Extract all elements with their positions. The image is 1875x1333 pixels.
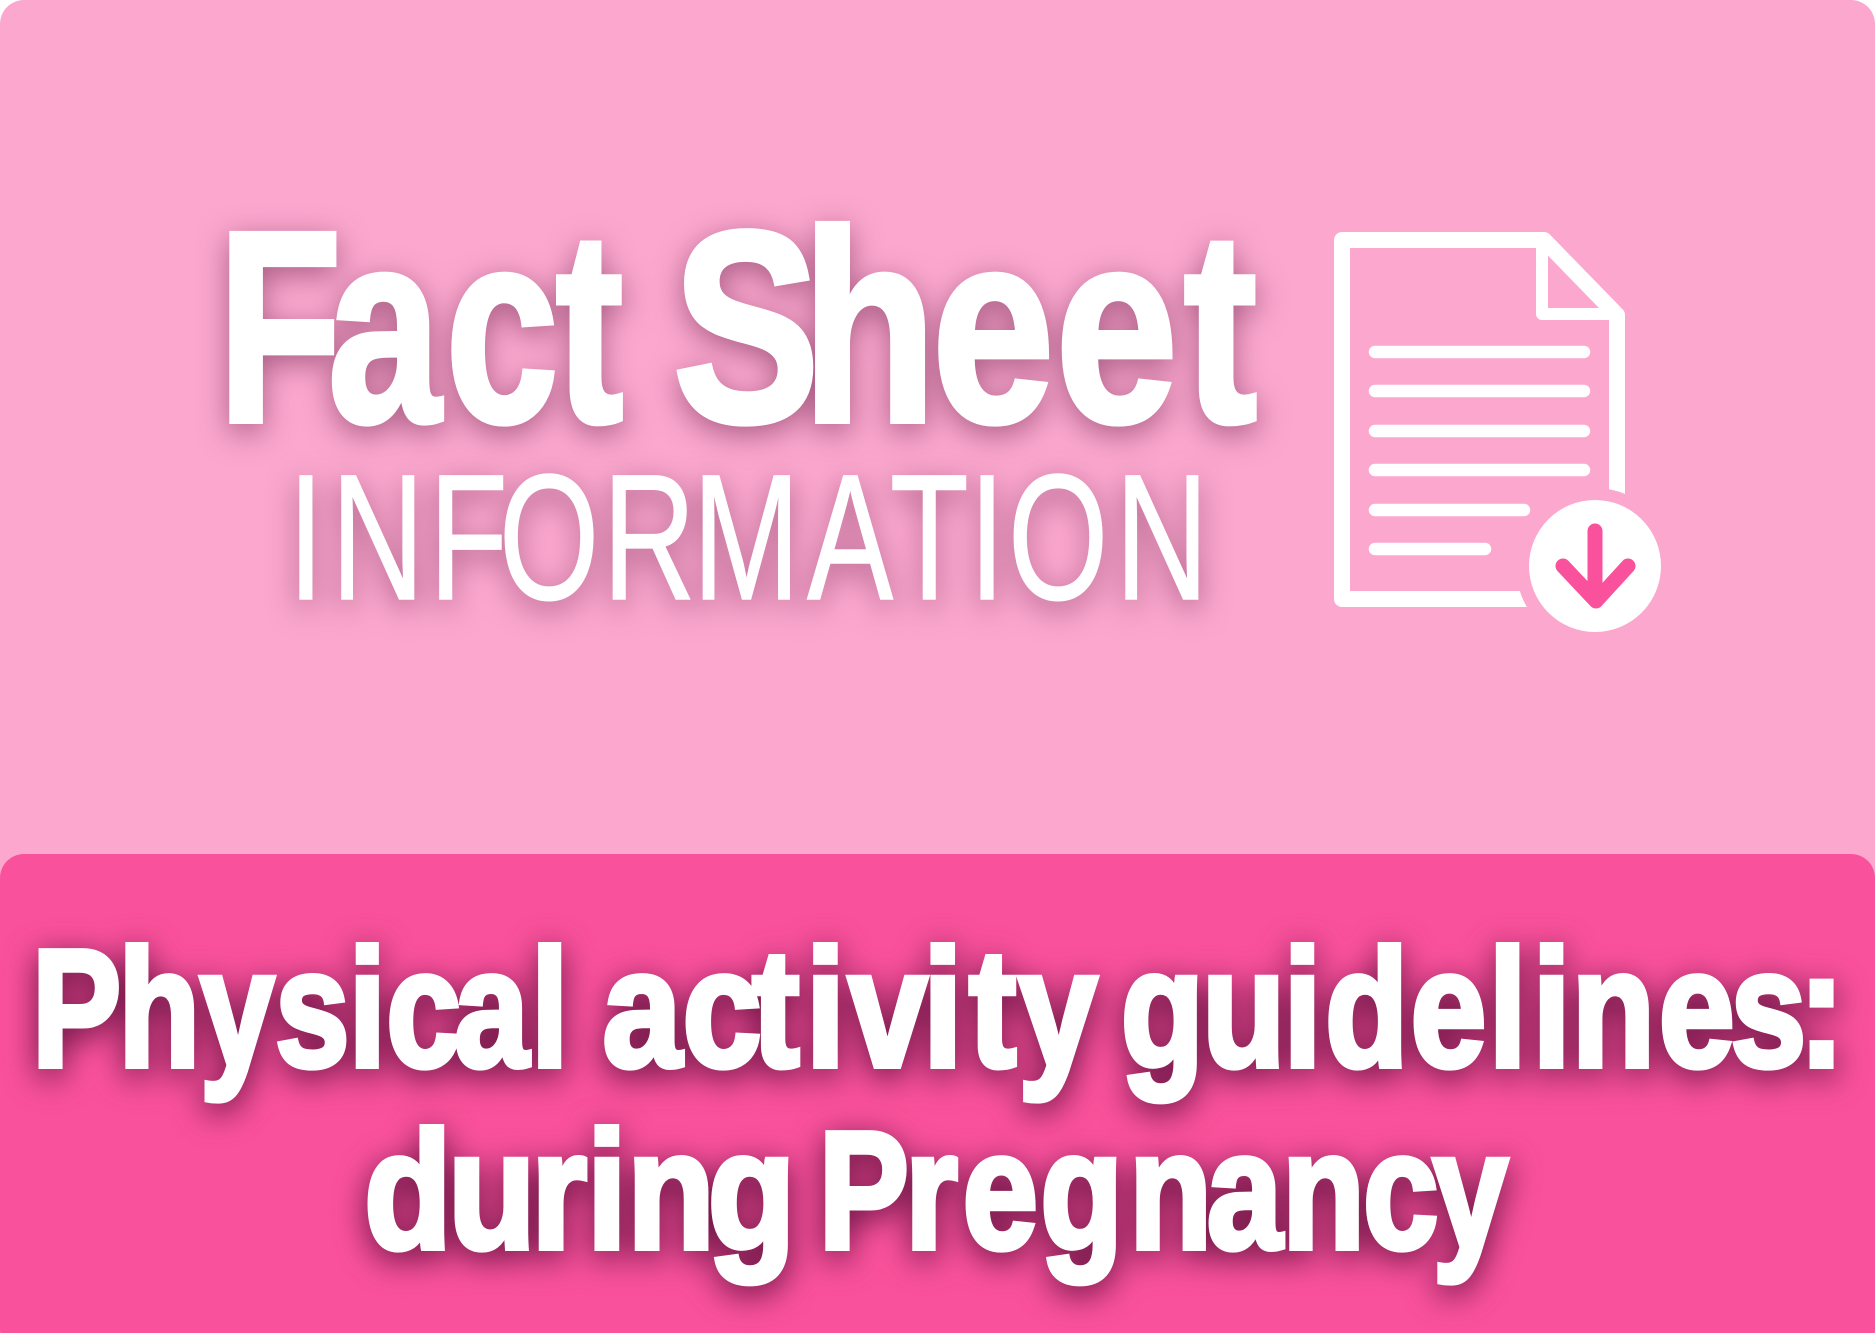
heading: Fact Sheet: Sheet	[673, 176, 1257, 479]
heading: Fact Sheet: Fact	[218, 175, 623, 479]
title line 2: Pregnancy	[819, 1097, 1508, 1284]
title line 2	[364, 1097, 1508, 1284]
title line 1: guidelines:	[1121, 916, 1844, 1102]
panel: bottom title band	[0, 854, 1875, 1333]
heading: Fact Sheet	[218, 175, 1257, 479]
subheading: INFORMATION: INFORMATION	[288, 438, 1208, 638]
title line 1: activity	[603, 915, 1097, 1102]
title line 2: during	[364, 1097, 795, 1283]
panel: top background	[0, 0, 1875, 900]
title line 1	[32, 915, 1844, 1102]
title line 1: Physical	[32, 916, 568, 1102]
icon: document with download arrow	[1342, 240, 1674, 646]
